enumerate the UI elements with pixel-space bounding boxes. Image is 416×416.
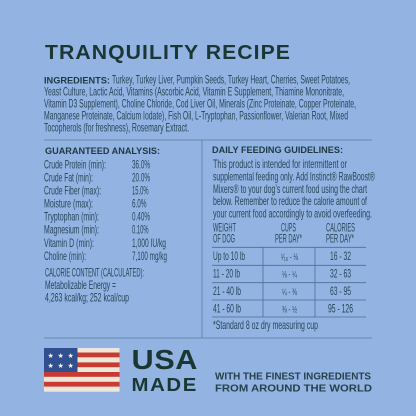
analysis values: 1,000 IU/kg [132,236,166,250]
calorie content: Metabolizable Energy = [45,278,116,292]
table row: up to 10 lb: ¹⁄₁₆ - ⅛ [281,252,298,262]
analysis labels: Vitamin D (min): [44,236,94,250]
usa made wordmark: USA [132,344,198,375]
table row: 41-60 lb: 41 - 60 lb [213,301,241,315]
analysis labels: Moisture (max): [44,197,93,211]
tagline [215,371,372,394]
table row: 41-60 lb: ⅜ - ½ [282,304,297,314]
ingredients text block: INGREDIENTS: [44,76,110,86]
feeding table: CALORIES [326,221,355,235]
table header: PER DAY* [326,231,354,245]
table row: 11-20 lb: 11 - 20 lb [213,267,240,281]
icon: usa flag: ★ [48,352,54,360]
panel: guaranteed analysis [44,146,167,305]
feeding paragraph [213,157,375,221]
analysis labels: Crude Fiber (max): [44,184,101,198]
footnote: *Standard 8 oz dry measuring cup [213,318,318,332]
table row: 41-60 lb [213,301,353,315]
calorie content [45,266,144,305]
tagline: FROM AROUND THE WORLD [215,384,372,394]
table row: up to 10 lb: 16 - 32 [330,249,351,263]
title: TRANQUILITY RECIPE [45,42,291,64]
ingredients text block: Tocopherols (for freshness), Rosemary Extract. [44,120,189,134]
analysis labels [44,157,106,263]
feeding table [212,221,366,317]
calorie content: 4,263 kcal/kg; 252 kcal/cup [45,291,129,305]
usa made wordmark [132,344,198,395]
analysis values: 36.0% [132,157,150,171]
panel: guaranteed analysis: CALORIE CONTENT (CALCULATED): [45,266,144,280]
analysis values: 7,100 mg/kg [132,249,167,263]
icon: usa flag: ★ [68,352,74,360]
icon: usa flag: ★ [58,362,64,370]
table row: up to 10 lb: Up to 10 lb [213,249,245,263]
analysis labels: Tryptophan (min): [44,210,99,224]
panel: daily feeding guidelines [212,145,375,332]
analysis values: 15.0% [132,184,149,198]
table row: 21-40 lb: 63 - 95 [330,284,351,298]
ingredients text block [44,72,356,134]
table row: 11-20 lb: 32 - 63 [330,267,351,281]
guaranteed analysis heading: GUARANTEED ANALYSIS: [45,146,160,157]
table row: 21-40 lb: 21 - 40 lb [213,284,241,298]
table header: WEIGHT [213,221,236,235]
analysis labels: Choline (min): [44,249,86,263]
usa made wordmark: MADE [132,374,198,395]
analysis values [132,157,167,263]
table header: OF DOG [213,231,235,245]
icon: usa flag: ★ [48,362,54,370]
table row: 11-20 lb [213,267,351,281]
analysis values: 0.10% [132,223,149,237]
tagline: WITH THE FINEST INGREDIENTS [215,371,371,382]
feeding heading: DAILY FEEDING GUIDELINES: [212,145,343,156]
table row: up to 10 lb [213,249,351,263]
analysis values: 0.40% [132,210,150,224]
analysis values: 20.0% [132,171,150,185]
table header: CUPS [281,221,296,235]
table header [213,221,355,245]
table row: 41-60 lb: 95 - 126 [328,301,353,315]
icon: usa flag: ★ [68,362,74,370]
analysis values: 6.0% [132,197,147,211]
table row: 11-20 lb: ⅛ - ¼ [282,270,297,280]
table row: 21-40 lb: ¼ - ⅜ [282,287,297,297]
analysis labels: Crude Fat (min): [44,171,93,185]
table header: PER DAY* [275,231,302,245]
analysis labels: Magnesium (min): [44,223,99,237]
icon: usa flag: ★ [58,352,64,360]
icon: usa flag [44,348,120,392]
analysis labels: Crude Protein (min): [44,157,106,171]
table row: 21-40 lb [213,284,351,298]
